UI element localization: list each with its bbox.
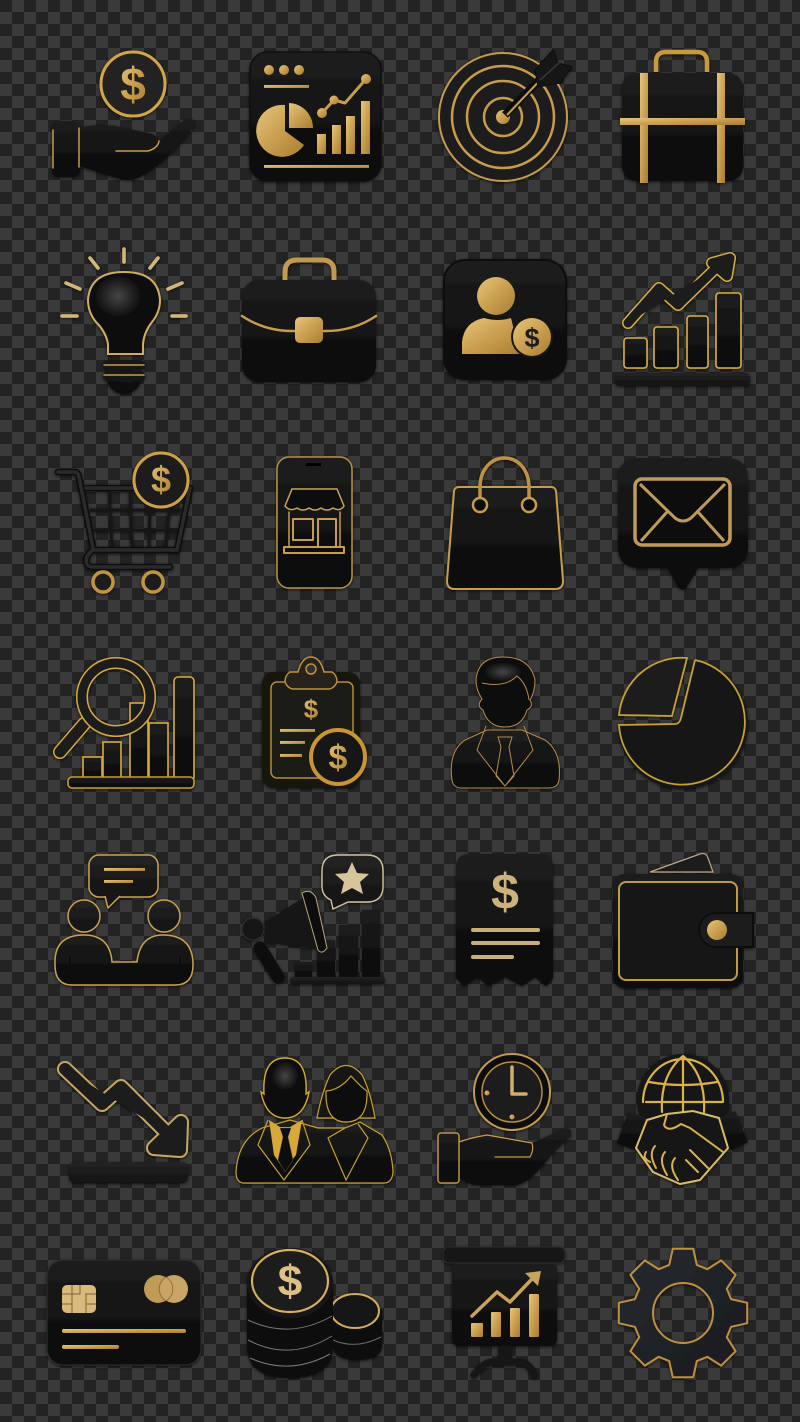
icon: megaphone, star bubble and bars (242, 855, 385, 984)
icon: wallet (613, 854, 753, 988)
icon: envelope in speech bubble (618, 458, 748, 590)
icon: strapped suitcase (620, 52, 745, 183)
icon: two people talking (55, 855, 193, 985)
icon: gear (619, 1249, 747, 1377)
icon: pie chart (618, 658, 748, 789)
icon: phone with storefront (277, 457, 352, 588)
icon: hand holding dollar coin (52, 52, 195, 180)
icon: growth bar chart (615, 258, 750, 386)
icon: globe and handshake (617, 1054, 748, 1184)
icon: hand holding clock (438, 1054, 571, 1185)
icon: clipboard with coin: $ (329, 739, 348, 777)
icon: clipboard with coin: $ (304, 694, 319, 724)
icon: credit card (47, 1260, 201, 1365)
icon: target with arrow (439, 50, 572, 181)
icon: receipt: $ (491, 864, 519, 920)
icon: receipt (456, 854, 553, 986)
icon: stacks of coins: $ (278, 1257, 302, 1306)
icon: businessman and businesswoman (236, 1058, 393, 1183)
icon: analytics dashboard (250, 52, 381, 181)
icon: user with dollar coin: $ (524, 323, 540, 353)
icon: clipboard with coin (262, 657, 365, 788)
icon: magnifier over bar chart (60, 663, 194, 788)
icon: light bulb (62, 249, 186, 394)
icon: shopping bag (447, 458, 563, 589)
icon: user with dollar coin (444, 260, 566, 379)
icon: stacks of coins (247, 1248, 382, 1378)
icon: shopping cart with coin: $ (151, 459, 171, 500)
icon: shopping cart with coin (58, 453, 190, 592)
icon: businessman (451, 657, 559, 788)
icon: briefcase with clasp (242, 260, 376, 382)
icon: presentation board (443, 1247, 565, 1375)
icon: downward trend arrow (65, 1069, 188, 1183)
icon: hand holding dollar coin: $ (120, 58, 146, 110)
